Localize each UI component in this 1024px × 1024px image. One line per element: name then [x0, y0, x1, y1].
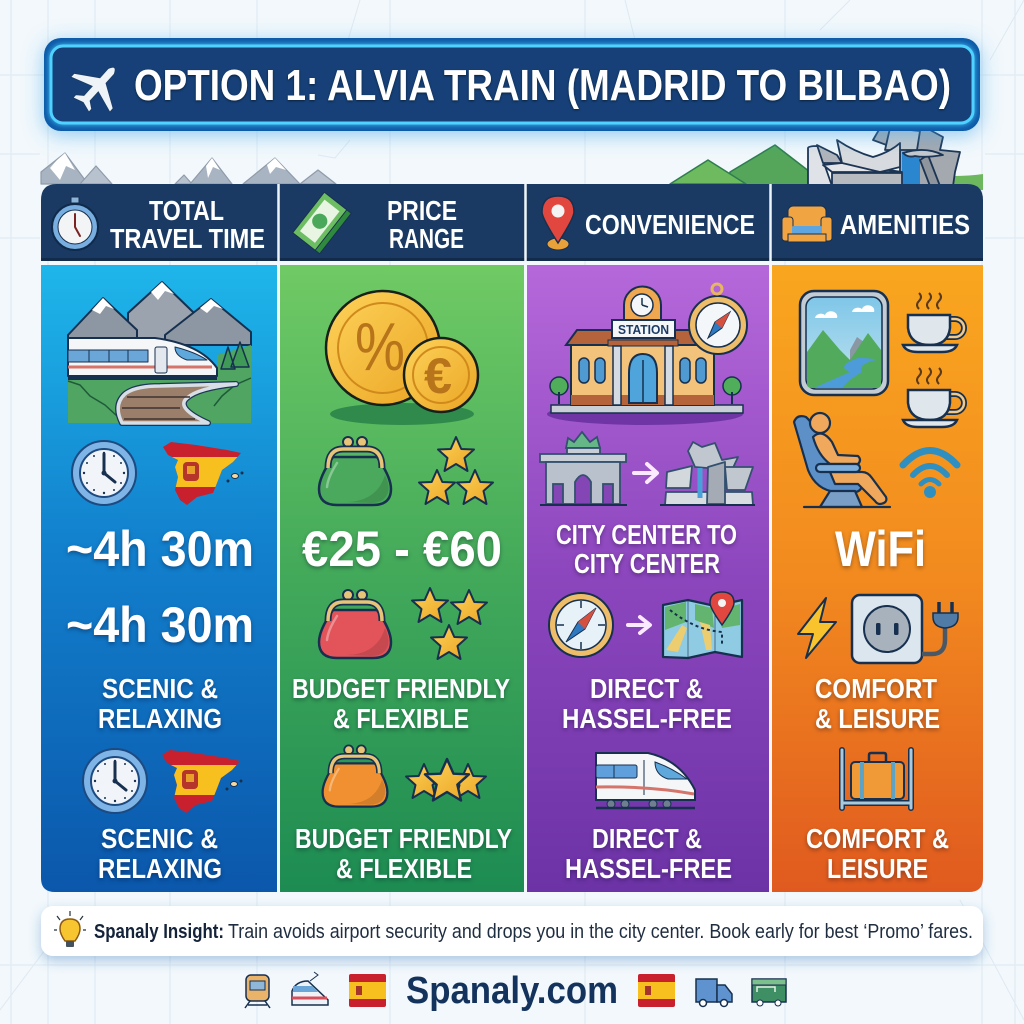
column heading: convenience — [542, 196, 755, 250]
label: city center to city center: CITY CENTER TO — [556, 519, 737, 550]
panel: price range — [280, 265, 524, 892]
icon: spanish flag left — [349, 974, 386, 1007]
illustration: coins — [326, 291, 478, 425]
icon: coffee cup — [903, 368, 964, 427]
icon: green purse — [319, 437, 391, 505]
label: budget friendly repeat: BUDGET FRIENDLY — [295, 823, 512, 854]
icon: stopwatch — [52, 197, 98, 250]
column heading: amenities: AMENITIES — [840, 209, 970, 240]
icon: spanish flag right — [638, 974, 675, 1007]
footer row — [245, 970, 786, 1012]
icon: clock small — [83, 749, 147, 813]
label: direct and hassle free repeat: DIRECT & — [592, 823, 702, 854]
decorative snowy mountains left — [41, 153, 336, 184]
decorative green hills and museum — [670, 117, 983, 190]
label: budget friendly repeat: & FLEXIBLE — [336, 853, 472, 884]
travel time value repeat: ~4h 30m — [66, 597, 254, 653]
icon: star row — [406, 759, 486, 801]
label: direct and hassle free repeat: HASSEL-FREE — [565, 853, 732, 884]
icon: train — [596, 753, 695, 808]
label: scenic and relaxing: SCENIC & — [102, 673, 218, 704]
icon: delivery van — [696, 979, 732, 1006]
brand name: Spanaly.com — [406, 970, 618, 1012]
table header band — [41, 184, 983, 261]
label: scenic and relaxing repeat: RELAXING — [98, 853, 222, 884]
arrow — [634, 464, 657, 482]
label: scenic and relaxing — [98, 673, 222, 734]
column heading: total travel time — [52, 195, 265, 254]
label: budget friendly — [292, 673, 510, 734]
label: budget friendly: & FLEXIBLE — [333, 703, 469, 734]
icon: compass — [549, 593, 613, 657]
title banner — [44, 38, 980, 131]
price value: €25 - €60 — [302, 521, 502, 577]
icon: luggage rack with suitcase — [842, 750, 911, 808]
icon: metro train — [245, 975, 270, 1008]
panel: convenience — [527, 265, 769, 892]
icon: electric train — [292, 972, 328, 1005]
label: comfort and leisure repeat: COMFORT & — [806, 823, 949, 854]
label: city center to city center — [556, 519, 737, 579]
label: scenic and relaxing repeat — [98, 823, 222, 884]
label: comfort and leisure repeat — [806, 823, 949, 884]
column heading: total travel time: TRAVEL TIME — [110, 223, 265, 254]
label: direct and hassle free — [562, 673, 732, 734]
panel: travel time — [41, 265, 277, 892]
icon: spain flag map — [163, 442, 244, 508]
label: budget friendly: BUDGET FRIENDLY — [292, 673, 510, 704]
icon: red purse — [319, 590, 391, 658]
illustration: station with compass — [547, 284, 747, 425]
panel: amenities — [772, 265, 983, 892]
icon: wifi — [903, 450, 957, 498]
icon: spain flag map small — [162, 750, 242, 816]
label: comfort and leisure repeat: LEISURE — [827, 853, 928, 884]
column heading: amenities — [782, 206, 970, 242]
label: budget friendly repeat — [295, 823, 512, 884]
insight callout — [41, 906, 983, 956]
icon: sofa — [782, 206, 832, 242]
illustration: station with compass: STATION — [618, 322, 669, 337]
icon: three stars — [419, 437, 493, 504]
illustration: train through mountains — [68, 282, 251, 423]
column heading: price range: PRICE — [387, 195, 457, 226]
icon: banknotes — [293, 192, 351, 254]
label: direct and hassle free: DIRECT & — [590, 673, 703, 704]
label: city center to city center: CITY CENTER — [574, 548, 720, 579]
icon: light bulb — [54, 911, 86, 947]
icon: map pin — [542, 196, 574, 250]
illustration: coins: % — [355, 309, 405, 385]
column heading: total travel time: TOTAL — [149, 195, 224, 226]
illustration: coins: € — [424, 348, 452, 404]
label: comfort and leisure: & LEISURE — [815, 703, 940, 734]
label: scenic and relaxing: RELAXING — [98, 703, 222, 734]
icon: clock — [72, 441, 136, 505]
illustration: madrid gate — [540, 432, 627, 505]
label: direct and hassle free: HASSEL-FREE — [562, 703, 732, 734]
icon: lightning bolt — [798, 598, 836, 658]
arrow — [628, 617, 650, 633]
column heading: price range: RANGE — [389, 223, 464, 254]
label: scenic and relaxing repeat: SCENIC & — [101, 823, 218, 854]
icon: airplane — [61, 50, 134, 122]
icon: coffee cup — [903, 293, 964, 352]
column heading: convenience: CONVENIENCE — [585, 209, 755, 240]
icon: power socket and plug — [852, 595, 958, 663]
illustration: guggenheim museum — [660, 442, 755, 505]
value: wifi: WiFi — [835, 521, 926, 577]
label: comfort and leisure — [815, 673, 940, 734]
icon: bus — [752, 979, 786, 1006]
icon: train window view — [800, 291, 888, 395]
icon: reclining passenger seat — [794, 413, 890, 507]
column heading: price range — [293, 192, 464, 254]
icon: folded map with pin — [663, 592, 742, 658]
label: direct and hassle free repeat — [565, 823, 732, 884]
icon: three stars — [412, 588, 487, 659]
insight text: Spanaly Insight: — [94, 921, 224, 943]
travel time value: ~4h 30m — [66, 521, 254, 577]
icon: orange purse — [323, 745, 387, 807]
label: comfort and leisure: COMFORT — [815, 673, 937, 704]
